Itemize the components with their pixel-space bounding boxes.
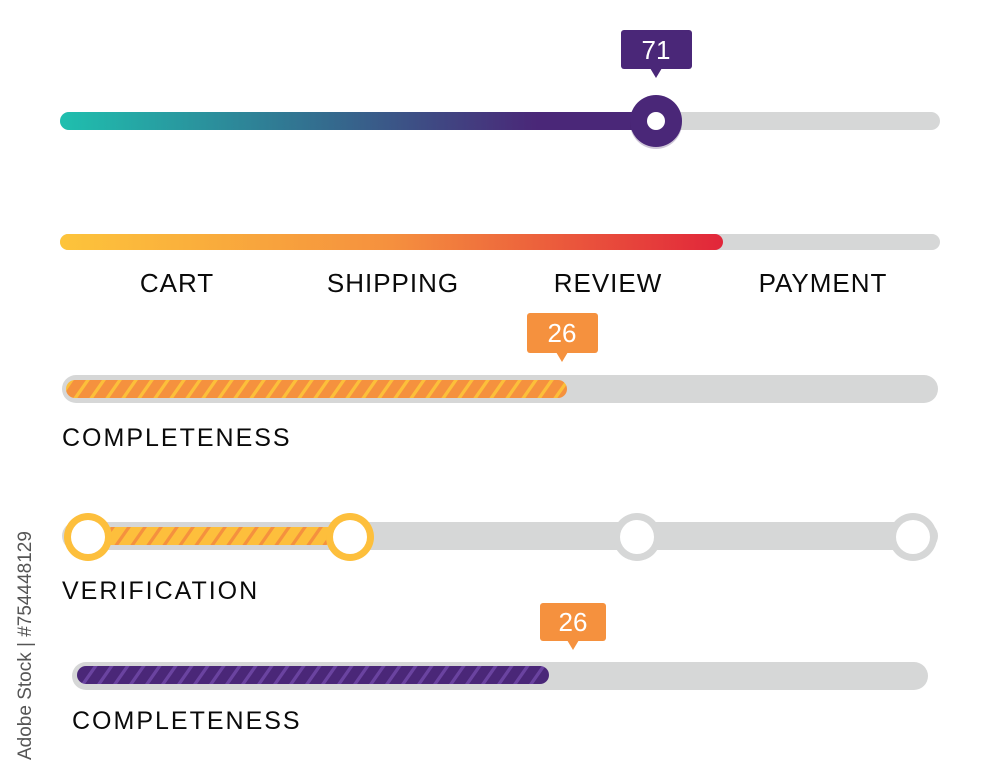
checkout steps bar: [60, 234, 940, 298]
step labels: SHIPPING: [327, 268, 459, 298]
tooltip 71: [621, 30, 692, 78]
tooltip 26: [540, 603, 606, 650]
label completeness: COMPLETENESS: [62, 424, 292, 452]
step labels: [140, 268, 887, 298]
step labels: CART: [140, 268, 214, 298]
tooltip 26: 26: [559, 607, 587, 637]
step labels: PAYMENT: [759, 268, 887, 298]
slider bar 71: [60, 30, 940, 149]
tooltip 26 orange: [527, 313, 598, 362]
orange completeness bar: [62, 313, 938, 452]
verification steps: [62, 513, 938, 605]
slider knob: [630, 95, 682, 149]
tooltip 71: 71: [642, 35, 670, 65]
purple completeness bar: [72, 603, 928, 735]
label verification: VERIFICATION: [62, 577, 259, 605]
step circles: [64, 513, 937, 561]
tooltip 26 orange: 26: [548, 318, 576, 348]
label completeness 2: COMPLETENESS: [72, 707, 302, 735]
step labels: REVIEW: [554, 268, 662, 298]
side stock id text: Adobe Stock | #754448129: [15, 531, 36, 760]
